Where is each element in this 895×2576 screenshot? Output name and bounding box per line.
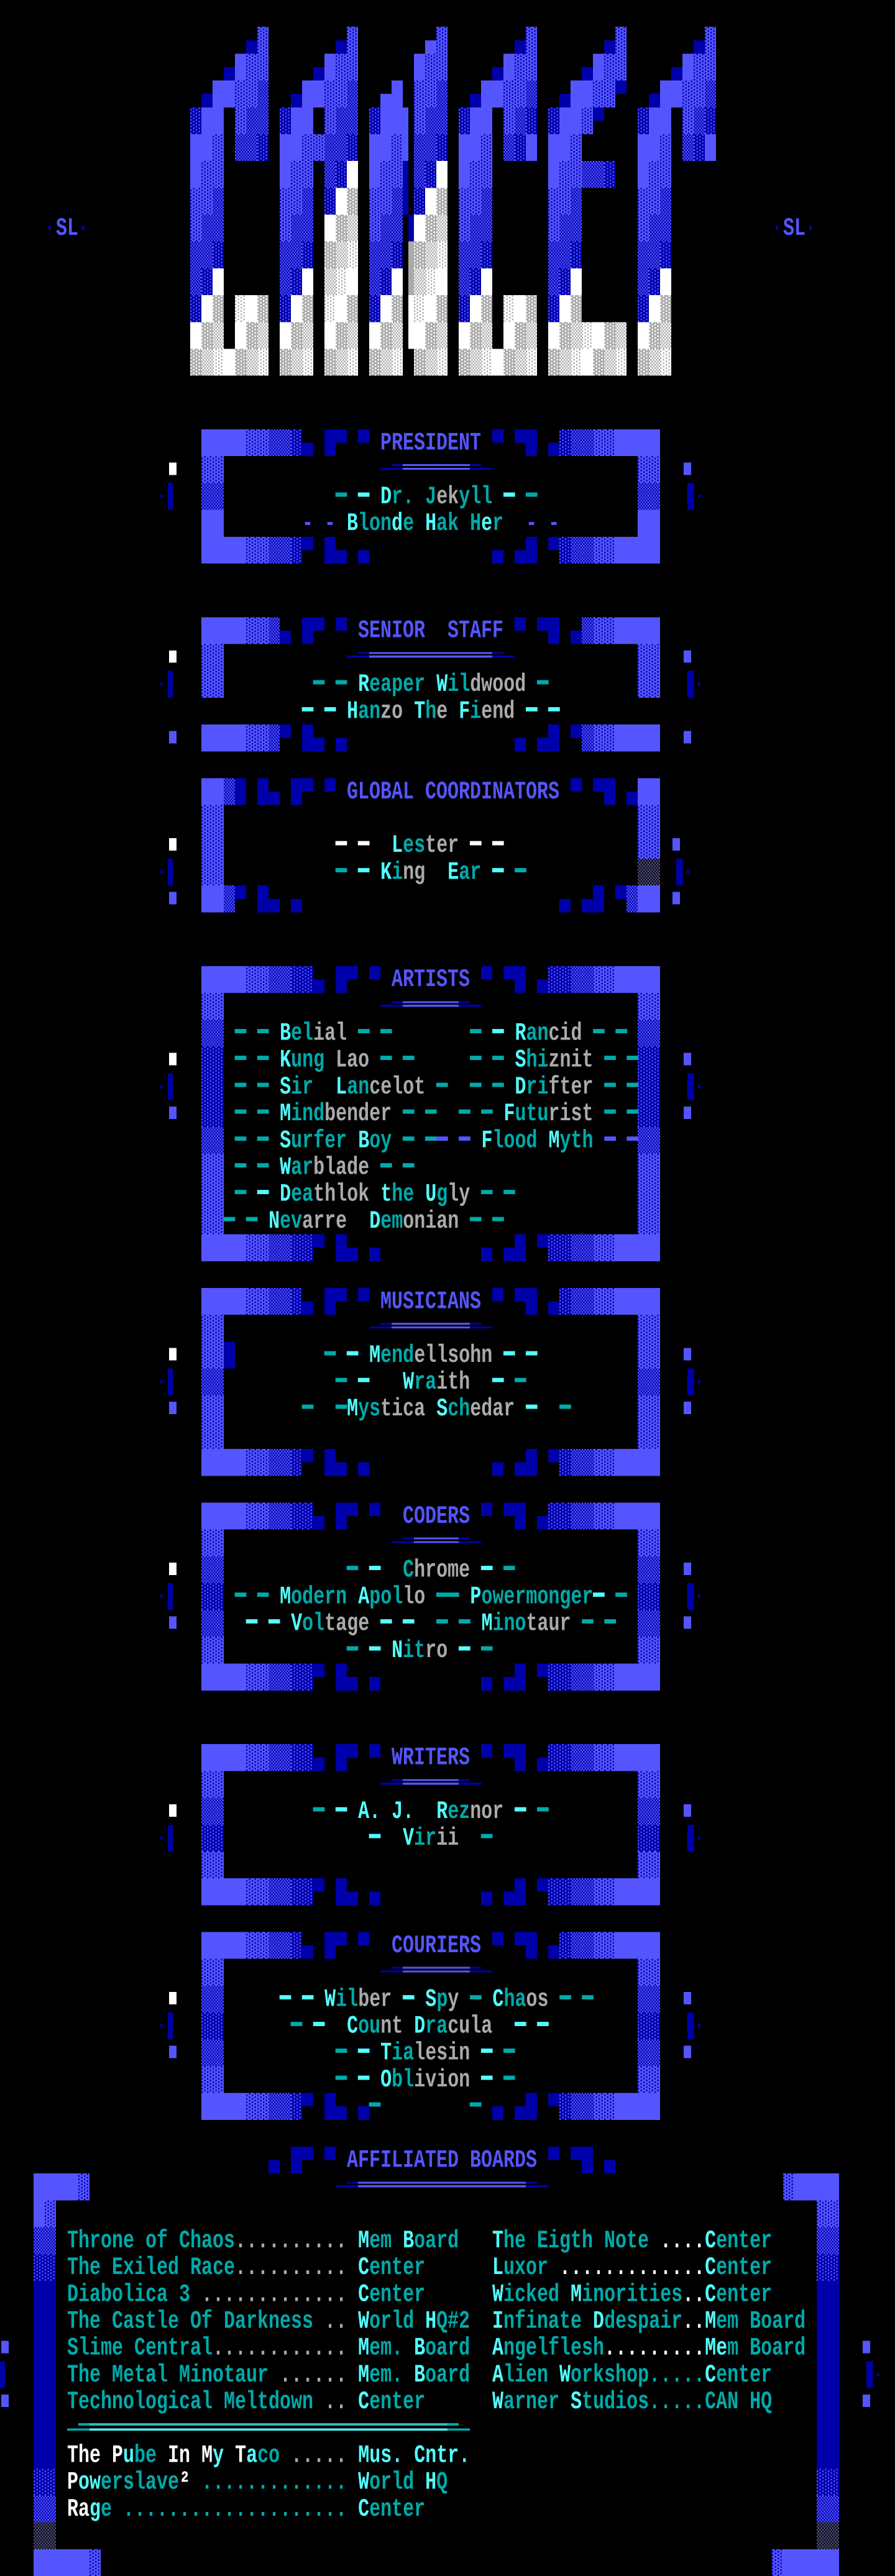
name row: ━ ━ Tialesin ━ ━: [335, 2039, 515, 2068]
panel frame: [201, 778, 660, 912]
panel: musicians: [160, 1288, 700, 1476]
board row: Luxor .............Center: [492, 2254, 772, 2283]
logo letter E: [548, 27, 626, 376]
side ornaments: [160, 1992, 700, 2058]
name row: ━ ━ Warblade ━ ━: [234, 1154, 415, 1182]
heading: GLOBAL COORDINATORS: [347, 778, 559, 806]
board row: Rage .................... Center: [67, 2495, 425, 2524]
name row: ━ ━ Hanzo The Fiend ━ ━: [301, 698, 560, 726]
panel frame: [201, 1932, 660, 2120]
panel: couriers: [160, 1932, 700, 2122]
panel frame: [201, 1502, 660, 1691]
logo letter R: [638, 27, 716, 376]
heading: WRITERS: [392, 1744, 470, 1773]
name row: ━ ━ Chrome ━ ━: [346, 1556, 515, 1585]
panel frame: [201, 966, 660, 1261]
board row: Powerslave² ............. World HQ: [67, 2469, 448, 2497]
name row: ━ ━ Lester ━ ━: [335, 832, 504, 861]
side ornaments: [160, 463, 700, 510]
board row: Throne of Chaos.......... Mem Board: [67, 2227, 459, 2255]
heading: COURIERS: [392, 1932, 481, 1960]
heading: SENIOR STAFF: [358, 617, 503, 646]
side ornaments: [160, 1563, 700, 1628]
side ornaments: [0, 2341, 879, 2407]
heading: PRESIDENT: [380, 429, 481, 458]
side ornaments: [160, 651, 700, 743]
name row: ━ ━ Sir Lancelot ━ ━ ━ Drifter ━ ━: [234, 1074, 639, 1102]
name row: ━ ━ King Ear ━ ━: [335, 859, 526, 887]
side ornaments: [160, 1053, 700, 1119]
board row: Slime Central............ Mem. Board: [67, 2334, 470, 2363]
name row: ━ ━ Mindbender ━ ━ ━ ━ Futurist ━ ━: [234, 1100, 639, 1129]
panel frame: [201, 617, 660, 751]
panel frame: [201, 1744, 660, 1905]
tag dots: [48, 226, 812, 230]
name row: ━ ━ Deathlok the Ugly ━ ━: [234, 1181, 515, 1209]
tag left: SL: [56, 215, 78, 243]
panel: president: [160, 429, 700, 564]
board row: The Exiled Race.......... Center: [67, 2254, 425, 2283]
name row: ━ ━ Belial ━ ━ ━ ━ Rancid ━ ━: [234, 1020, 628, 1048]
side ornaments: [160, 838, 689, 904]
board row: The Eigth Note ....Center: [492, 2227, 772, 2255]
panel frame: [201, 1288, 660, 1476]
name row: ━ ━ Nevarre Demonian ━ ━: [223, 1207, 504, 1236]
name row: ━ ━ Dr. Jekyll ━ ━: [335, 483, 538, 511]
board list left: [67, 2227, 470, 2417]
board row: The Metal Minotaur ...... Mem. Board: [67, 2362, 470, 2390]
tag right: SL: [783, 215, 806, 243]
name row: ━ Virii ━: [369, 1825, 493, 1853]
panel: global coordinators: [160, 778, 689, 912]
board row: Infinate Ddespair..Mem Board: [492, 2308, 806, 2336]
heading: AFFILIATED BOARDS: [347, 2147, 537, 2175]
heading: CODERS: [403, 1503, 470, 1531]
logo letter N: [369, 27, 448, 376]
name row: ━ ━ Oblivion ━ ━: [335, 2066, 515, 2094]
logo: CANCER block lettering: [190, 27, 716, 376]
cyan double divider: [67, 2423, 470, 2431]
side ornaments: [160, 1348, 700, 1414]
panel: affiliated boards: [0, 2147, 879, 2576]
name row: ━ ━ Nitro ━ ━: [346, 1637, 493, 1665]
name row: ━ ━ Surfer Boy ━ ━━ ━ Flood Myth ━ ━: [234, 1127, 639, 1156]
name row: ━ ━ Wraith ━ ━: [335, 1369, 526, 1397]
panel: senior staff: [160, 617, 700, 751]
heading: MUSICIANS: [380, 1288, 481, 1317]
board row: The Pube In My Taco ..... Mus. Cntr.: [67, 2442, 470, 2470]
name row: ━ ━Mystica Schedar ━ ━: [301, 1395, 571, 1424]
panel frame: [34, 2147, 839, 2576]
name row: ━ ━ Mendellsohn ━ ━: [324, 1341, 538, 1370]
name row: ━ ━ Modern Apollo ━━ Powermonger━ ━: [234, 1583, 627, 1612]
board row: Wicked Minorities..Center: [492, 2281, 772, 2309]
heading: ARTISTS: [392, 966, 470, 995]
name row: ━ ━ A. J. Reznor ━ ━: [313, 1798, 549, 1826]
board row: Alien Workshop.....Center: [492, 2362, 772, 2390]
name row: ━ ━ Wilber ━ Spy ━ Chaos ━ ━: [279, 1986, 594, 2014]
logo letter C second: [459, 27, 537, 376]
panel: coders: [160, 1502, 700, 1691]
side ornaments: [160, 1804, 700, 1852]
name row: ━ ━ Reaper Wildwood ━: [313, 671, 549, 700]
panel: writers: [160, 1744, 700, 1905]
board list right: [492, 2227, 806, 2417]
side tags SL: [48, 215, 812, 243]
name row: ━ ━ Kung Lao ━ ━ ━ ━ Shiznit ━ ━: [234, 1046, 639, 1075]
logo letter A: [280, 27, 358, 376]
board row: Technological Meltdown .. Center: [67, 2388, 425, 2417]
stray dashes on bottom bar: ━ ━: [369, 2093, 482, 2122]
panel frame: [201, 429, 660, 564]
board row: The Castle Of Darkness .. World HQ#2: [67, 2308, 470, 2336]
name row: ━ ━ Count Dracula ━ ━: [290, 2012, 549, 2041]
board row: Angelflesh.........Mem Board: [492, 2334, 806, 2363]
board list lower: [67, 2442, 470, 2524]
name row: ━ ━ Voltage ━ ━ ━ ━ Minotaur ━ ━: [246, 1610, 617, 1638]
panel: artists: [160, 966, 700, 1261]
board row: Diabolica 3 ............. Center: [67, 2281, 425, 2309]
board row: Warner Studios.....CAN HQ: [492, 2388, 772, 2417]
name row: - - Blonde Hak Her - -: [302, 510, 559, 538]
logo letter C: [190, 27, 268, 376]
